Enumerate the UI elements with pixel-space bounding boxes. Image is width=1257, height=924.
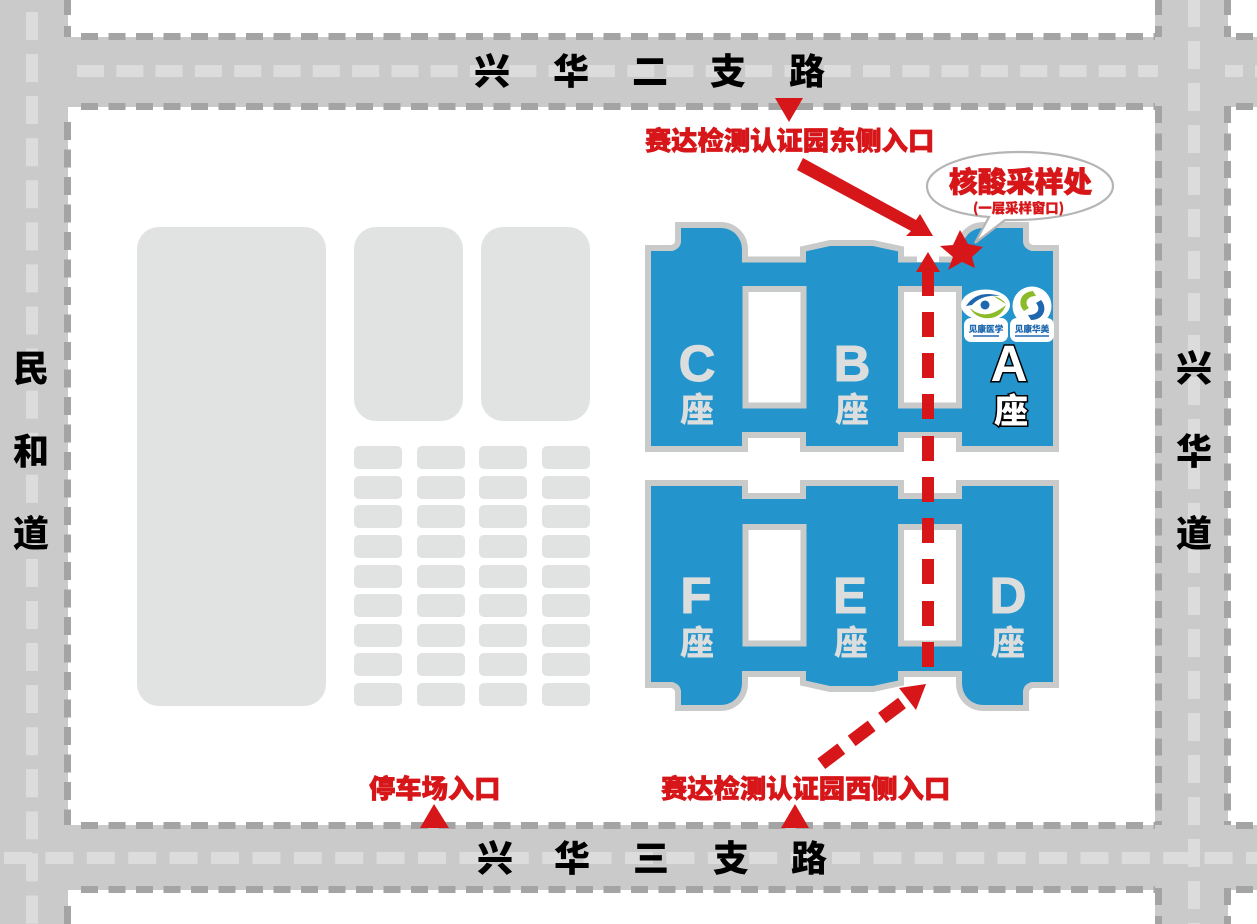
- road name: 民和道: 民: [13, 340, 49, 392]
- building block A B C: [648, 225, 1056, 449]
- building block A B C: A: [991, 335, 1027, 392]
- building block D E F: 座: [834, 616, 868, 665]
- road name: 兴华道: 道: [1176, 505, 1212, 557]
- logo: 见康医学: 见康医学: [969, 323, 1004, 334]
- road name: 民和道: 和: [13, 423, 49, 475]
- callout bubble: (一层采样窗口): [973, 197, 1064, 217]
- building block A B C: C: [679, 335, 715, 392]
- building block D E F: 座: [991, 616, 1025, 665]
- arrow: west entrance dashed: [821, 684, 926, 764]
- building block A B C: B: [834, 335, 870, 392]
- road name: 兴华道: 华: [1176, 423, 1212, 475]
- road name: 民和道: 道: [13, 505, 49, 557]
- building block D E F: E: [833, 567, 867, 624]
- building block A B C: 座: [680, 383, 714, 432]
- callout bubble: [927, 152, 1113, 243]
- arrow: east entrance: [797, 158, 933, 236]
- logo: 见康医学: [961, 290, 1010, 342]
- building block D E F: D: [990, 567, 1026, 624]
- building block A B C: 座: [835, 383, 869, 432]
- road name: 兴华三支路: 兴华三支路: [477, 830, 827, 882]
- pale neighbouring buildings: [137, 227, 590, 706]
- gap in outline around route arrow tip: [917, 254, 939, 262]
- road name: 兴华道: [1176, 340, 1212, 557]
- label: parking entrance: 停车场入口: [369, 767, 500, 806]
- logo: 见康华美: 见康华美: [1015, 323, 1050, 334]
- callout bubble: 核酸采样处: [949, 160, 1092, 201]
- parking grid: [354, 446, 590, 706]
- label: east entrance: 赛达检测认证园东侧入口: [645, 119, 934, 158]
- building block D E F: [648, 483, 1056, 708]
- marker: east entrance triangle: [775, 98, 803, 122]
- marker: west entrance triangle: [781, 804, 809, 828]
- building block D E F: F: [680, 567, 712, 624]
- road name: 兴华二支路: 兴华二支路: [474, 43, 825, 95]
- label: west entrance: 赛达检测认证园西侧入口: [661, 767, 950, 806]
- route arrow: vertical dashed: [916, 252, 940, 667]
- icon: red star: [940, 230, 983, 270]
- logo: 见康华美: [1010, 286, 1054, 342]
- building block D E F: 座: [680, 616, 714, 665]
- road name: 兴华道: 兴: [1176, 340, 1212, 392]
- marker: parking entrance triangle: [420, 804, 449, 828]
- building block A B C: 座: [994, 384, 1028, 433]
- road name: 民和道: [13, 340, 49, 557]
